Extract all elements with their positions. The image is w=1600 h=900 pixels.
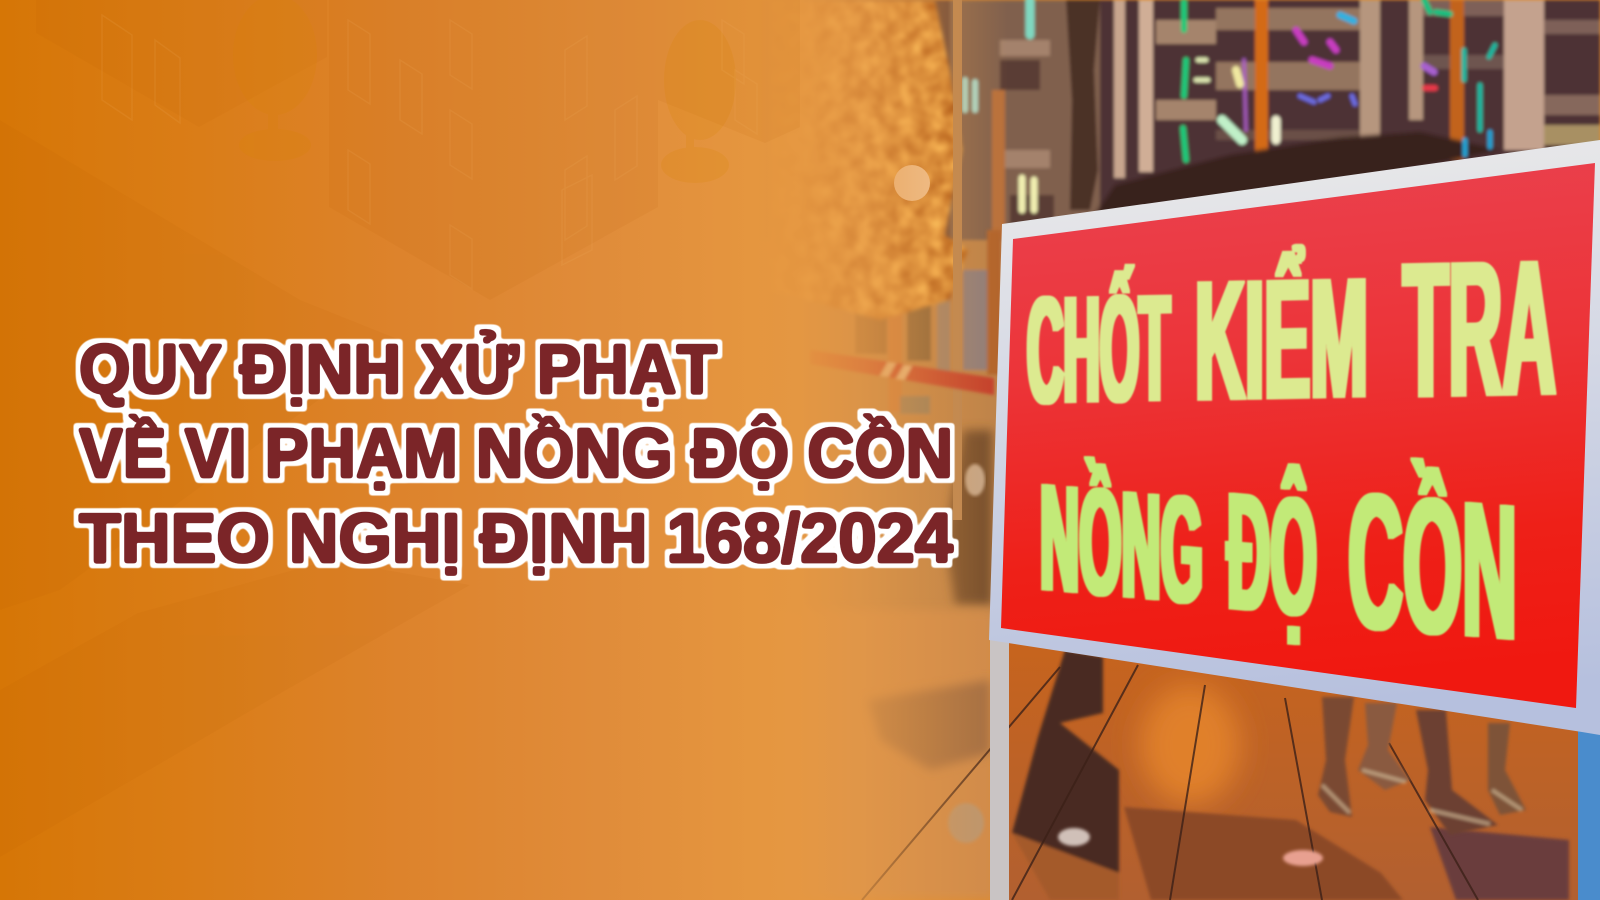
sign wording line 1 [1027,219,1556,438]
litter on the pavement [948,803,1323,866]
sign wording line 2: NỒNG [1040,452,1203,637]
soft left shadow [867,680,990,770]
title [79,329,953,577]
title line 1: QUY ĐỊNH XỬ PHẠT [79,329,717,408]
dark bicycles [945,430,992,605]
right post [1578,728,1600,900]
faint isometric city pattern [0,0,800,857]
pedestrians' legs [1318,697,1526,835]
sign wording line 2: ĐỘ [1227,458,1317,652]
building facade [760,0,1600,420]
mid ground behind the sign [760,230,1005,640]
shadows [1012,650,1569,900]
neon lights [965,0,1495,210]
sign frame [989,140,1600,735]
red barrier [810,350,994,395]
tile lines [862,665,1478,900]
bright patch [1140,685,1240,805]
window outlines [102,15,757,289]
left post [990,636,1009,900]
photo background: street at night [760,0,1600,900]
road sign [989,140,1600,900]
darker building blocks [0,0,800,857]
barrier arm [810,350,994,395]
pavement ground [760,610,1600,900]
red panel [1001,163,1595,708]
light pavement to the left [760,610,995,900]
pale blossom [965,464,985,496]
title line 3: THEO NGHỊ ĐỊNH 168/2024 [79,499,953,577]
dark bushes above sign [1090,132,1500,232]
palm trunks [1066,0,1100,210]
barrier stripes [880,362,912,380]
ground fill [990,625,1600,900]
street lamp pole [953,0,962,520]
sign wording line 1: CHỐT [1027,263,1170,436]
tree silhouettes [233,0,736,183]
tree with orange foliage [770,0,968,320]
title line 2: VỀ VI PHẠM NỒNG ĐỘ CỒN [79,413,953,492]
street lamp [894,165,930,201]
